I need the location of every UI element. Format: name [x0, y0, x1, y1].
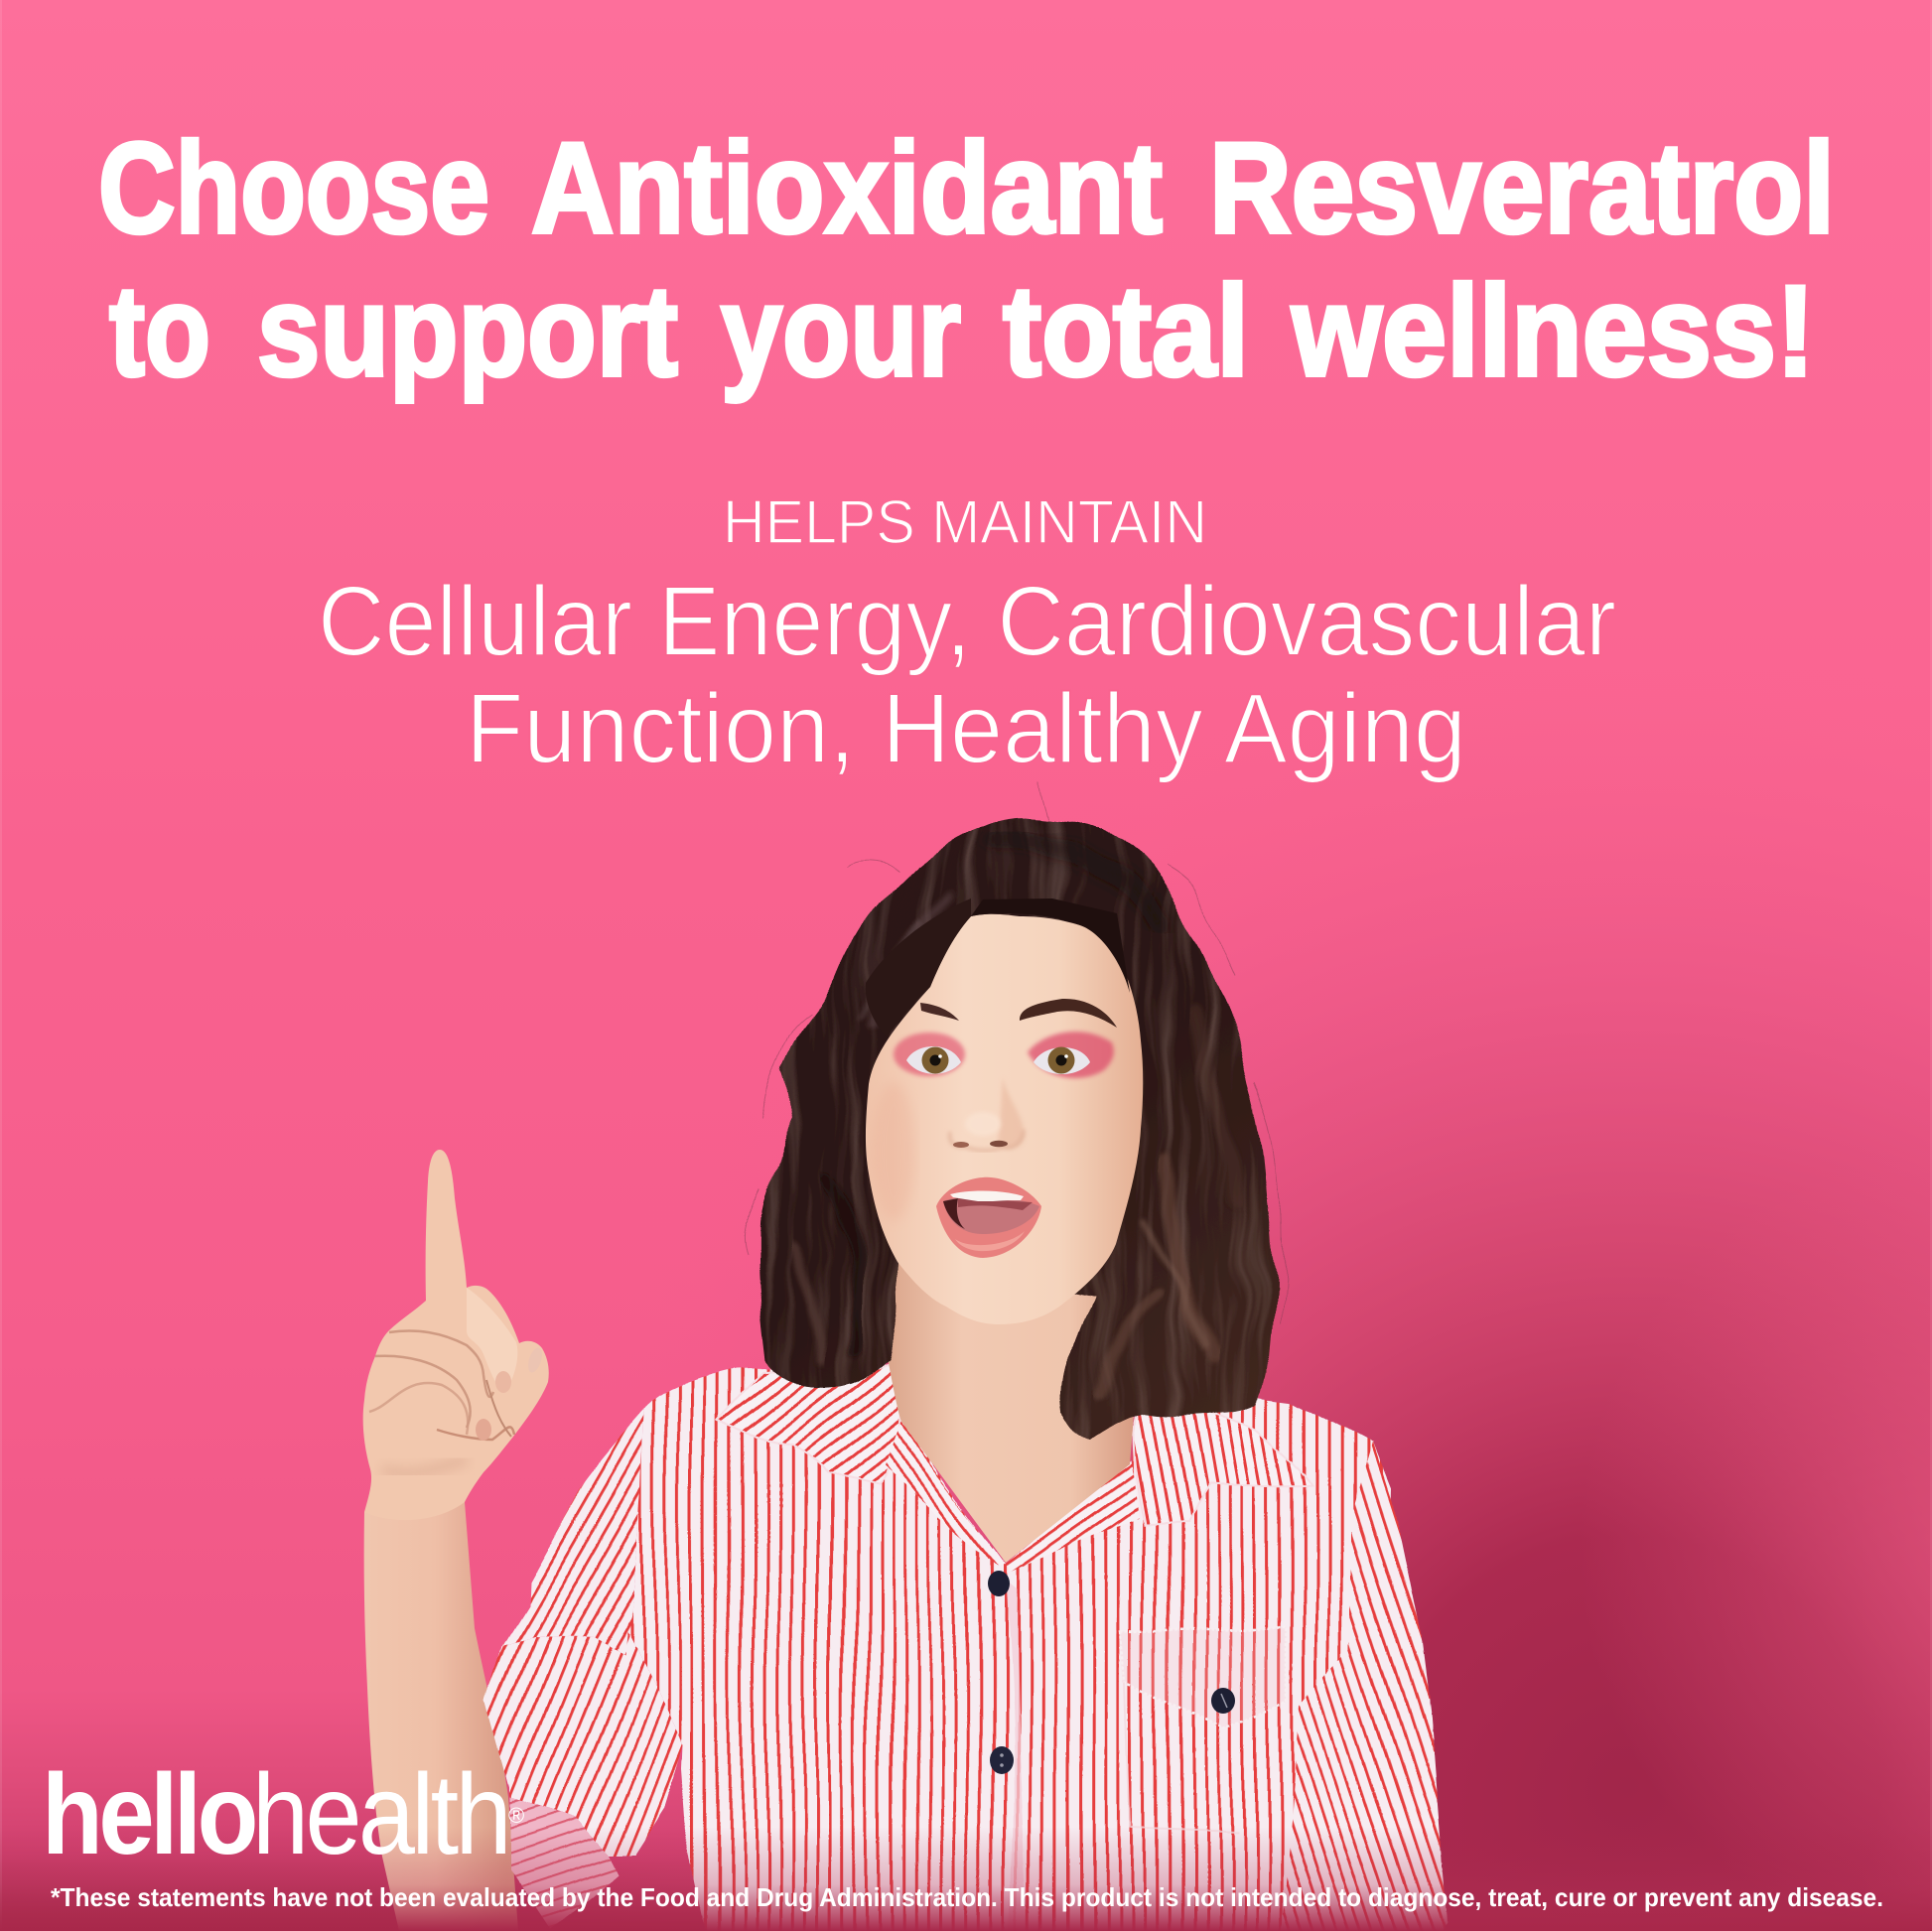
- neck: [882, 1231, 1136, 1563]
- buttons: [988, 1571, 1235, 1774]
- title: to: [109, 258, 210, 403]
- left collar: [718, 1362, 901, 1487]
- hand with raised finger: [363, 1150, 549, 1520]
- right sleeve: [1281, 1444, 1448, 1931]
- right lapel: [1006, 1459, 1138, 1571]
- hair: [744, 780, 1284, 1440]
- title: Antioxidant: [531, 115, 1163, 260]
- rolled cuff: [509, 1797, 619, 1929]
- eyebrows: [920, 1003, 959, 1021]
- face: [866, 898, 1143, 1324]
- logo: hellohealth: ®: [508, 1803, 524, 1828]
- bottom fade: [0, 1827, 1932, 1931]
- title: [98, 115, 1835, 403]
- helps maintain: HELPS MAINTAIN: [723, 488, 1207, 557]
- benefits line 2: Function, Healthy Aging: [466, 673, 1466, 784]
- cheek shadow: [872, 1082, 915, 1221]
- left eye: [906, 1046, 961, 1074]
- mouth: [936, 1177, 1041, 1258]
- left upper sleeve: [503, 1393, 660, 1655]
- title: wellness!: [1291, 258, 1815, 403]
- shirt body: [625, 1363, 1390, 1931]
- pocket: [1120, 1628, 1288, 1834]
- logo: hellohealth: health: [252, 1751, 508, 1878]
- nose: [950, 1077, 1025, 1151]
- left lapel: [883, 1422, 1006, 1565]
- subheading: [318, 488, 1616, 784]
- title: Choose: [98, 115, 489, 260]
- logo: hellohealth: [42, 1751, 524, 1878]
- shirt: [486, 1362, 1448, 1931]
- hair fringe: [866, 898, 971, 1037]
- title: your: [721, 258, 961, 403]
- photo: woman pointing up: [0, 780, 1932, 1931]
- arm: [364, 1502, 518, 1931]
- benefits line 1: Cellular Energy, Cardiovascular: [318, 566, 1616, 677]
- title: Resveratrol: [1209, 115, 1835, 260]
- logo: hellohealth: hello: [42, 1751, 255, 1878]
- title: total: [1003, 258, 1249, 403]
- title: support: [257, 258, 678, 403]
- right collar: [1132, 1398, 1313, 1526]
- placket: [1005, 1579, 1029, 1931]
- left lower sleeve: [486, 1631, 683, 1854]
- right eye: [1034, 1046, 1090, 1074]
- eyeshadow: [894, 1033, 965, 1076]
